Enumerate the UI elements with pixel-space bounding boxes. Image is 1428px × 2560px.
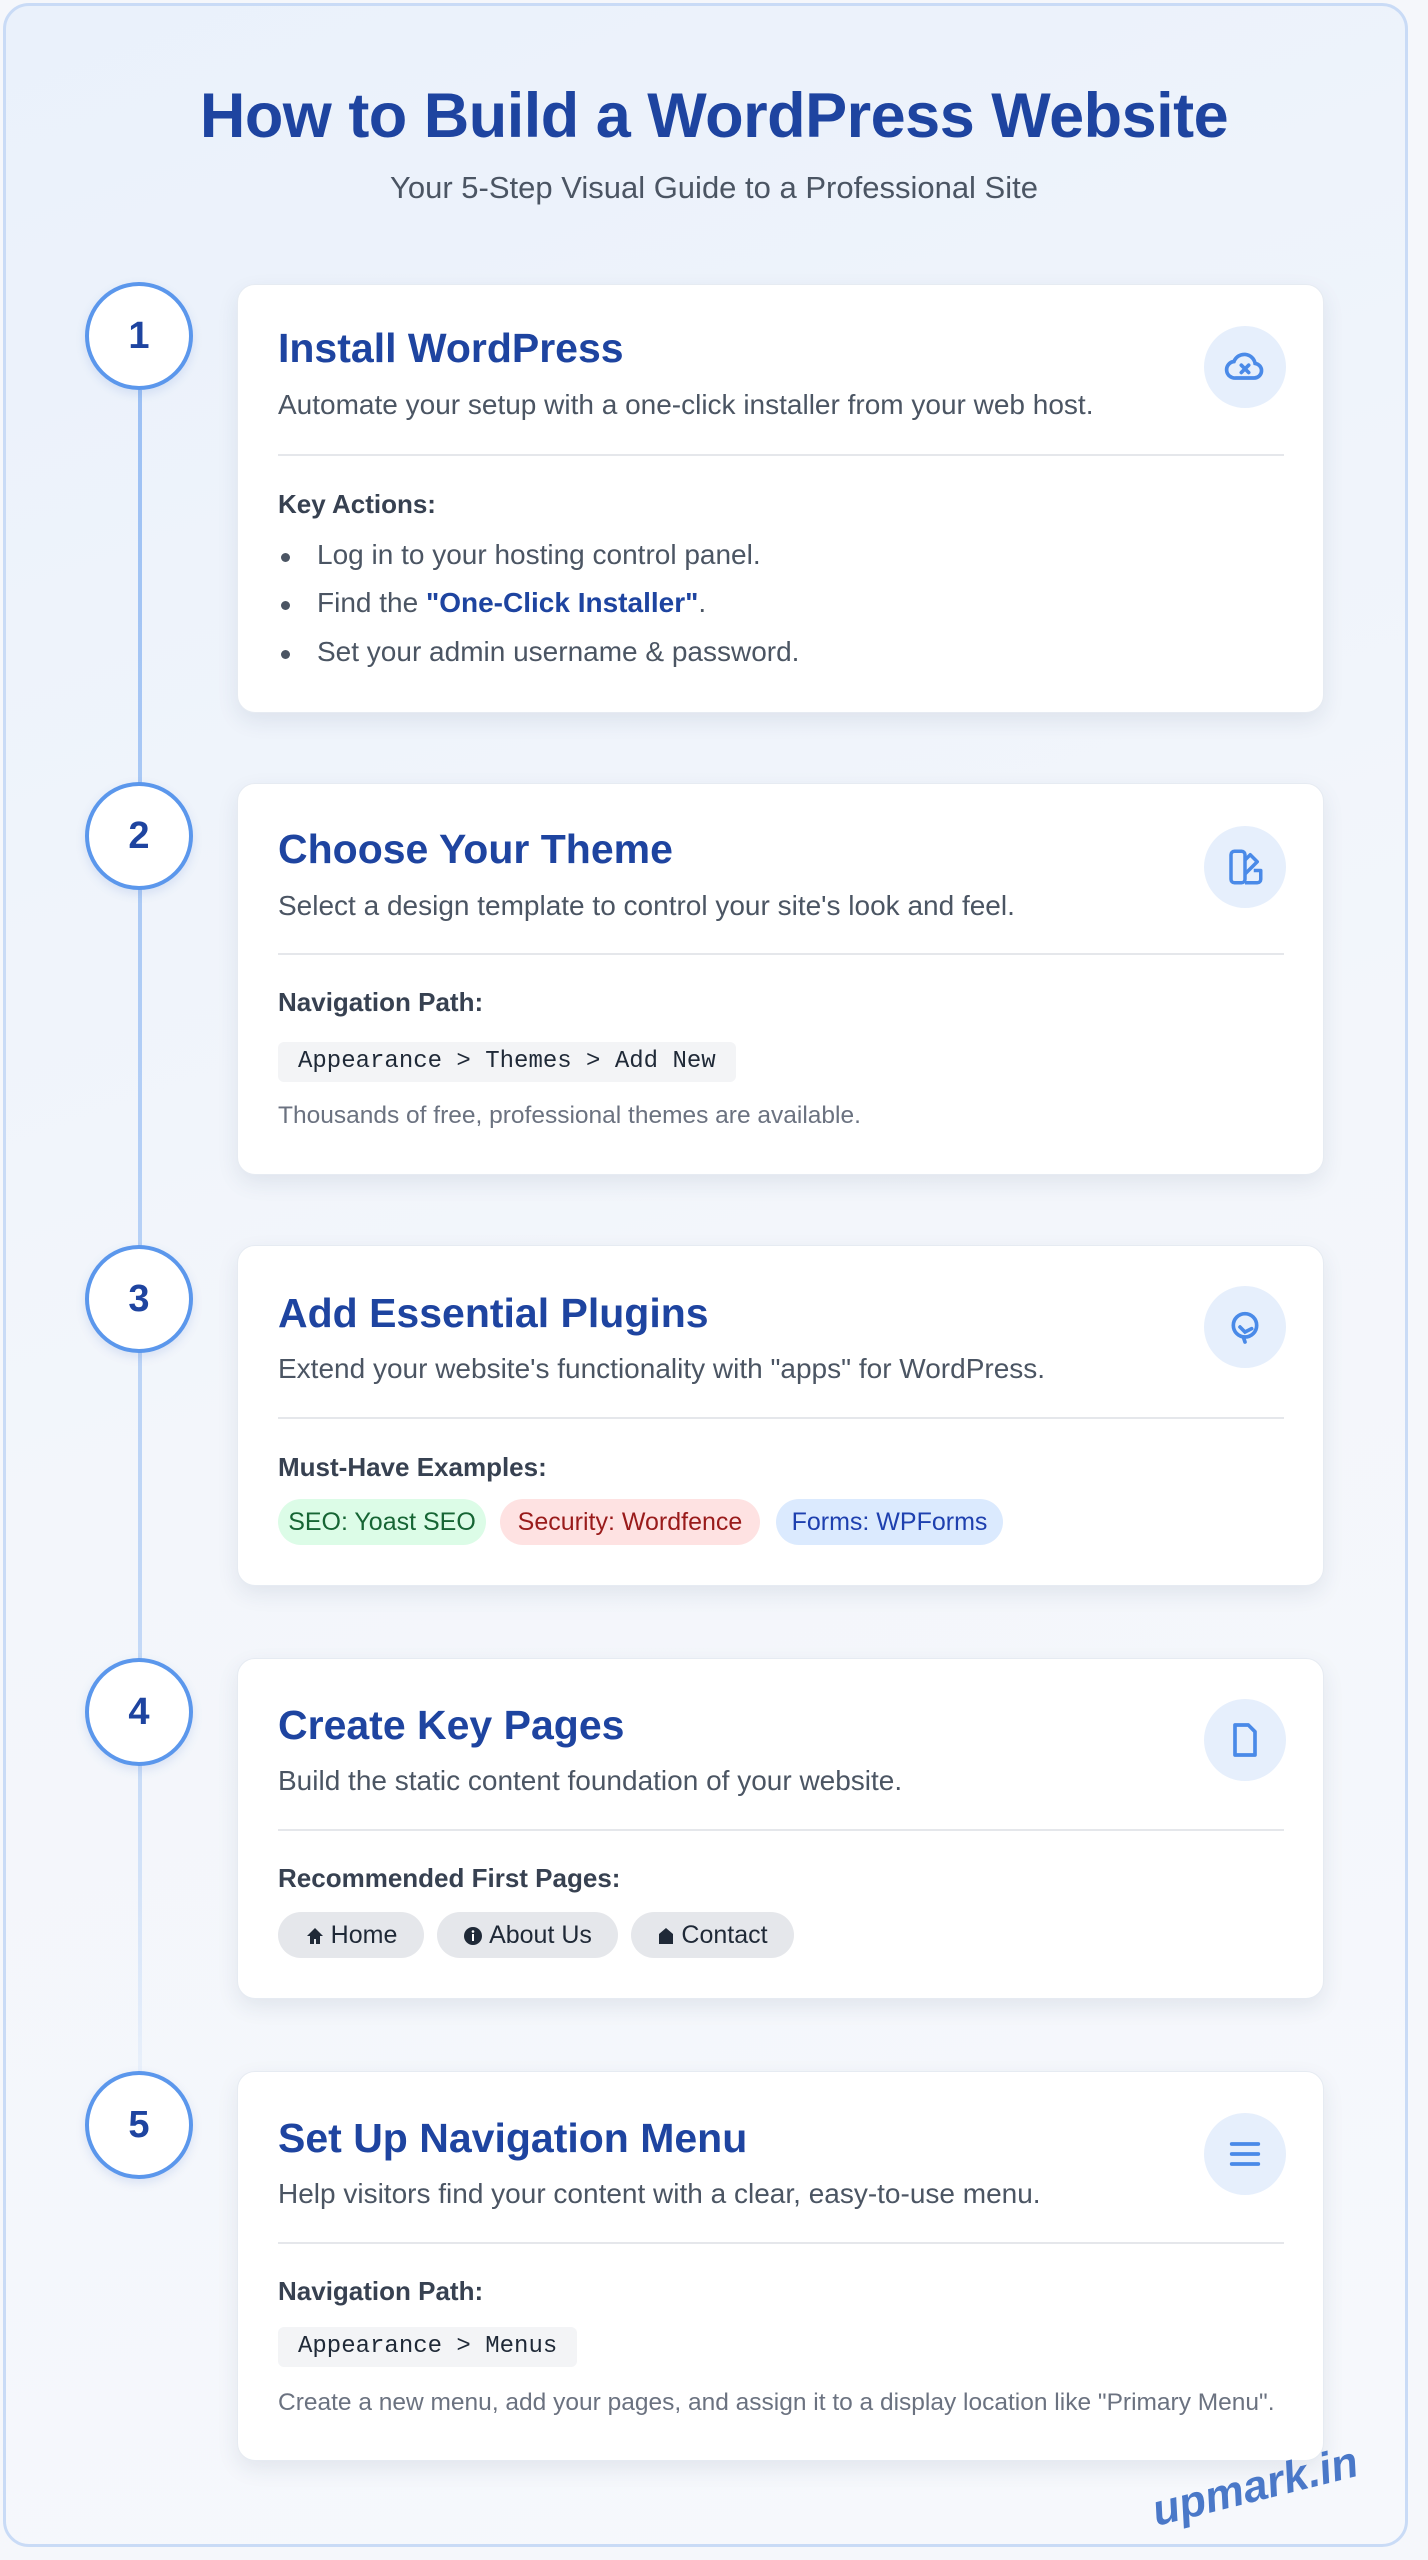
- step circle 3: 3: [128, 1278, 150, 1320]
- step circle 2: 2: [128, 814, 150, 856]
- icon: palette: [1204, 826, 1286, 908]
- description: Select a design template to control your site's look and feel.: [278, 890, 1015, 921]
- label: Recommended First Pages:: [278, 1863, 620, 1893]
- watermark: upmark.in: [1147, 2437, 1363, 2536]
- description: Automate your setup with a one-click installer from your web host.: [278, 389, 1093, 420]
- step circle 5: 5: [128, 2104, 150, 2146]
- heading: Install WordPress: [278, 325, 624, 371]
- pills: Forms: WPForms: [792, 1508, 987, 1536]
- page pills: About Us: [489, 1921, 592, 1949]
- icon: plugin: [1204, 1286, 1286, 1368]
- step circle 1: 1: [128, 314, 150, 356]
- code path: Appearance > Menus: [298, 2333, 557, 2360]
- page pills: Contact: [681, 1921, 768, 1949]
- panel: step 3: [237, 1245, 1324, 1586]
- subtitle: Your 5-Step Visual Guide to a Professional Site: [390, 170, 1038, 205]
- step circle 5: [85, 2071, 193, 2179]
- heading: Set Up Navigation Menu: [278, 2115, 747, 2161]
- step circle 4: [85, 1658, 193, 1766]
- icon: page: [1204, 1699, 1286, 1781]
- description: Build the static content foundation of your website.: [278, 1765, 902, 1796]
- pills: Security: Wordfence: [518, 1508, 742, 1536]
- label: Must-Have Examples:: [278, 1452, 547, 1482]
- bullet list: Set your admin username & password.: [317, 636, 799, 667]
- step circle 2: [85, 782, 193, 890]
- panel: step 2: [237, 783, 1324, 1175]
- panel: step 1: [237, 284, 1324, 713]
- heading: Add Essential Plugins: [278, 1290, 709, 1336]
- description: Help visitors find your content with a clear, easy-to-use menu.: [278, 2178, 1041, 2209]
- page pills: Home: [331, 1921, 397, 1949]
- step circle 1: [85, 282, 193, 390]
- panel: step 5: [237, 2071, 1324, 2461]
- code path: Appearance > Themes > Add New: [298, 1048, 716, 1075]
- code path: [278, 2327, 577, 2367]
- heading: Create Key Pages: [278, 1702, 624, 1748]
- code path: [278, 1042, 736, 1082]
- page pills: [278, 1912, 794, 1958]
- label: Navigation Path:: [278, 987, 483, 1017]
- pills: [278, 1499, 1003, 1545]
- label: Navigation Path:: [278, 2276, 483, 2306]
- bullet list: Log in to your hosting control panel.: [317, 539, 761, 570]
- step circle 3: [85, 1245, 193, 1353]
- bullet list: [281, 539, 799, 667]
- bullet list: Find the "One-Click Installer".: [317, 587, 706, 618]
- description: Extend your website's functionality with "apps" for WordPress.: [278, 1353, 1045, 1384]
- step circle 4: 4: [128, 1690, 150, 1732]
- title: How to Build a WordPress Website: [200, 81, 1228, 151]
- note: Create a new menu, add your pages, and assign it to a display location like "Primary Menu".: [278, 2389, 1275, 2416]
- note: Thousands of free, professional themes are available.: [278, 1102, 861, 1129]
- label: Key Actions:: [278, 489, 436, 519]
- heading: Choose Your Theme: [278, 826, 673, 872]
- pills: SEO: Yoast SEO: [288, 1508, 476, 1536]
- panel: step 4: [237, 1658, 1324, 1999]
- icon: cloud: [1204, 326, 1286, 408]
- timeline line: [138, 390, 142, 2110]
- icon: menu: [1204, 2113, 1286, 2195]
